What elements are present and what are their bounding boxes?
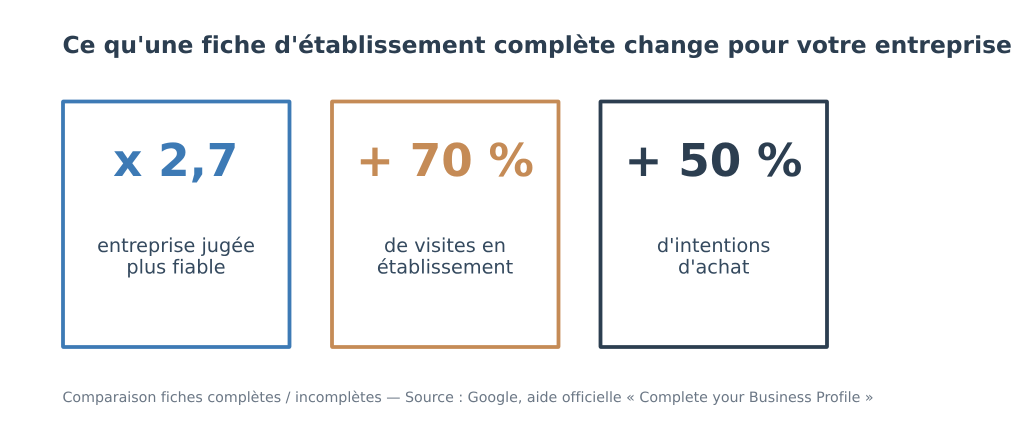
panel: x 2,7 (63, 102, 290, 347)
description: d'intentions d'achat: d'intentions (657, 234, 770, 257)
panel: + 70 % (332, 102, 558, 347)
description: d'intentions d'achat: d'achat (678, 256, 750, 278)
source note: Comparaison fiches complètes / incomplètes — Source : Google, aide officielle « Complete your Business Profile » (62, 390, 874, 406)
description: de visites en établissement: de visites en (384, 234, 506, 257)
panel: + 50 % (600, 102, 827, 347)
description: entreprise jugée plus fiable: plus fiable (126, 256, 226, 278)
title: Ce qu'une fiche d'établissement complète change pour votre entreprise (62, 31, 1012, 59)
description: de visites en établissement: établissement (377, 256, 514, 278)
stat: + 50 %: + 50 % (625, 134, 802, 187)
stat: + 70 %: + 70 % (356, 134, 534, 187)
stat: x 2,7: x 2,7 (113, 134, 238, 187)
description: entreprise jugée plus fiable: entreprise jugée (97, 234, 255, 257)
